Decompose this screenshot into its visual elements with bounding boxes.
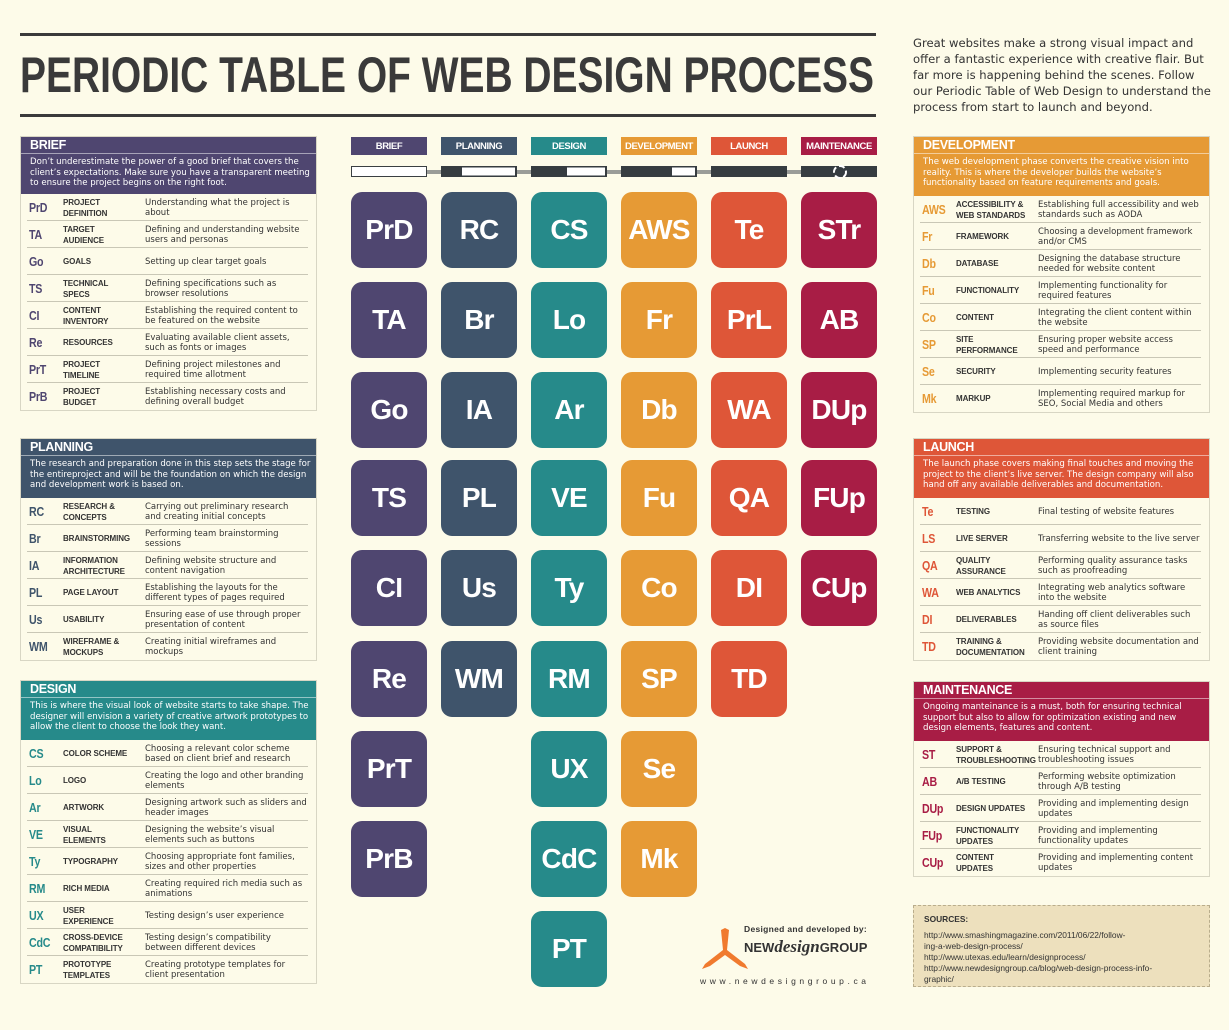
periodic tiles grid: PT bbox=[552, 933, 586, 964]
panel: launch: Final testing of website features bbox=[1038, 506, 1174, 516]
periodic tiles grid: Db bbox=[641, 394, 677, 425]
panel: design bbox=[20, 680, 317, 984]
periodic tiles grid: STr bbox=[818, 214, 860, 245]
panel: maintenance: MAINTENANCE bbox=[923, 683, 1012, 697]
panel: development: DEVELOPMENT bbox=[923, 138, 1015, 152]
periodic tiles grid: CI bbox=[376, 572, 402, 603]
panel: launch: TD bbox=[922, 639, 936, 654]
periodic tiles grid: AB bbox=[820, 304, 858, 335]
panel: design: USER EXPERIENCE bbox=[63, 906, 114, 926]
panel: brief bbox=[20, 136, 317, 411]
panel: maintenance: Performing website optimization through A/B testing bbox=[1038, 772, 1176, 792]
panel: planning bbox=[20, 438, 317, 661]
panel: development: Ensuring proper website access speed and performance bbox=[1038, 334, 1173, 354]
panel: brief: PrT bbox=[29, 362, 46, 377]
panel: maintenance: DUp bbox=[922, 801, 943, 816]
panel: design: Designing the website’s visual elements such as buttons bbox=[145, 824, 274, 844]
panel: brief: Establishing necessary costs and defining overall budget bbox=[145, 386, 286, 406]
panel: brief: TECHNICAL SPECS bbox=[63, 278, 108, 298]
panel: planning: Us bbox=[29, 612, 42, 627]
periodic tiles grid: Te bbox=[734, 214, 764, 245]
panel: development: ACCESSIBILITY & WEB STANDARDS bbox=[956, 200, 1025, 220]
panel: brief: PROJECT BUDGET bbox=[63, 386, 100, 406]
periodic tiles grid: AWS bbox=[628, 214, 690, 245]
panel: design: RM bbox=[29, 881, 45, 896]
periodic tiles grid: Co bbox=[641, 572, 677, 603]
panel: planning: Ensuring ease of use through proper presentation of content bbox=[145, 610, 300, 630]
panel: launch: DELIVERABLES bbox=[956, 615, 1017, 624]
intro text: Great websites make a strong visual impact and offer a fantastic experience with creative flair. But far more is happening behind the scenes. Follow our Periodic Table of Web Design to understand the process from start to launch and beyond. bbox=[913, 36, 1211, 114]
panel: development: AWS bbox=[922, 202, 946, 217]
panel: design: Ty bbox=[29, 854, 40, 869]
panel: design: Testing design’s compatibility between different devices bbox=[145, 932, 271, 952]
panel: design: ARTWORK bbox=[63, 803, 104, 812]
panel: development bbox=[913, 136, 1210, 413]
panel: planning: Creating initial wireframes and mockups bbox=[145, 636, 276, 656]
panel: maintenance: FUp bbox=[922, 828, 942, 843]
panel: maintenance: Providing and implementing design updates bbox=[1038, 798, 1189, 818]
panel: launch: QUALITY ASSURANCE bbox=[956, 556, 1006, 576]
logo credit: www.newdesigngroup.ca bbox=[700, 976, 870, 986]
periodic tiles grid: DUp bbox=[811, 394, 867, 425]
periodic tiles grid: SP bbox=[641, 663, 677, 694]
panel: planning: WM bbox=[29, 639, 47, 654]
panel: brief: PROJECT TIMELINE bbox=[63, 360, 100, 380]
panel: development: The web development phase converts the creative vision into reality. This is where the developer builds the website’s functionality based on feature requirements and goals. bbox=[923, 157, 1189, 188]
panel: development: FRAMEWORK bbox=[956, 232, 1009, 241]
panel: maintenance: CUp bbox=[922, 855, 943, 870]
panel: launch: Performing quality assurance tasks such as proofreading bbox=[1038, 556, 1187, 576]
panel: development: DATABASE bbox=[956, 259, 998, 268]
panel: brief: Defining and understanding website users and personas bbox=[145, 224, 299, 244]
panel: brief: PrB bbox=[29, 389, 47, 404]
panel: brief: Defining project milestones and required time allotment bbox=[145, 360, 280, 380]
panel: brief: Go bbox=[29, 254, 43, 269]
panel: design: CS bbox=[29, 746, 43, 761]
sources box: http://www.smashingmagazine.com/2011/06/22/follow- bbox=[924, 930, 1125, 940]
periodic tiles grid: PrD bbox=[365, 214, 413, 245]
sources box: graphic/ bbox=[924, 974, 954, 984]
periodic tiles grid: IA bbox=[466, 394, 492, 425]
panel: planning: WIREFRAME & MOCKUPS bbox=[63, 636, 119, 656]
panel: maintenance: FUNCTIONALITY UPDATES bbox=[956, 826, 1019, 846]
panel: launch: Transferring website to the live server bbox=[1038, 534, 1199, 544]
title bbox=[20, 33, 876, 117]
panel: planning: PL bbox=[29, 585, 42, 600]
sources box: http://www.newdesigngroup.ca/blog/web-design-process-info- bbox=[924, 963, 1152, 973]
panel: development: Co bbox=[922, 310, 936, 325]
periodic tiles grid: PL bbox=[462, 482, 496, 513]
panel: maintenance: A/B TESTING bbox=[956, 777, 1006, 786]
panel: brief: Evaluating available client assets, such as fonts or images bbox=[145, 332, 290, 352]
panel: design: Choosing a relevant color scheme based on client brief and research bbox=[145, 744, 290, 764]
periodic tiles grid: Br bbox=[464, 304, 494, 335]
panel: development: SITE PERFORMANCE bbox=[956, 334, 1018, 354]
periodic tiles grid: RM bbox=[548, 663, 590, 694]
sources box: SOURCES: bbox=[924, 914, 968, 924]
panel: maintenance bbox=[913, 681, 1210, 877]
panel: design: RICH MEDIA bbox=[63, 884, 110, 893]
panel: planning: Establishing the layouts for the different types of pages required bbox=[145, 582, 285, 602]
panel: maintenance: Providing and implementing content updates bbox=[1038, 852, 1193, 872]
panel: brief: Setting up clear target goals bbox=[145, 256, 266, 266]
panel: design: TYPOGRAPHY bbox=[63, 857, 118, 866]
periodic tiles grid: VE bbox=[551, 482, 587, 513]
periodic tiles grid: Lo bbox=[553, 304, 585, 335]
panel: development: Establishing full accessibility and web standards such as AODA bbox=[1038, 200, 1199, 220]
panel: design: Lo bbox=[29, 773, 42, 788]
logo credit bbox=[700, 924, 870, 986]
periodic tiles grid: UX bbox=[550, 753, 588, 784]
logo credit: Designed and developed by: bbox=[744, 924, 867, 934]
panel: brief: BRIEF bbox=[30, 138, 66, 152]
periodic tiles grid: TA bbox=[372, 304, 406, 335]
column labels: LAUNCH bbox=[730, 140, 768, 152]
panel: brief: RESOURCES bbox=[63, 338, 113, 347]
panel: planning: Carrying out preliminary research and creating initial concepts bbox=[145, 502, 288, 522]
panel: design: LOGO bbox=[63, 776, 86, 785]
periodic tiles grid: PrB bbox=[365, 843, 413, 874]
panel: maintenance: DESIGN UPDATES bbox=[956, 804, 1025, 813]
periodic tiles grid: CS bbox=[550, 214, 588, 245]
panel: design: CROSS-DEVICE COMPATIBILITY bbox=[63, 932, 123, 952]
panel: design: Creating required rich media such as animations bbox=[145, 878, 302, 898]
panel: design: DESIGN bbox=[30, 682, 76, 696]
panel: development: SECURITY bbox=[956, 367, 996, 376]
panel: planning: PAGE LAYOUT bbox=[63, 588, 118, 597]
panel: development: Fr bbox=[922, 229, 932, 244]
periodic tiles grid: Us bbox=[462, 572, 496, 603]
panel: brief: CI bbox=[29, 308, 39, 323]
panel: launch: TESTING bbox=[956, 507, 990, 516]
panel: development: Mk bbox=[922, 391, 936, 406]
panel: maintenance: AB bbox=[922, 774, 937, 789]
periodic tiles grid: Re bbox=[372, 663, 406, 694]
panel: design: Creating the logo and other branding elements bbox=[145, 770, 303, 790]
panel: planning: RC bbox=[29, 504, 44, 519]
panel: development: Implementing security features bbox=[1038, 366, 1172, 376]
panel: brief: TA bbox=[29, 227, 42, 242]
panel: design: CdC bbox=[29, 935, 50, 950]
panel: brief: PROJECT DEFINITION bbox=[63, 198, 107, 218]
periodic tiles grid: Fr bbox=[646, 304, 672, 335]
panel: brief: CONTENT INVENTORY bbox=[63, 306, 108, 326]
panel: planning: BRAINSTORMING bbox=[63, 534, 130, 543]
panel: development: Integrating the client content within the website bbox=[1038, 308, 1191, 328]
panel: design: Ar bbox=[29, 800, 40, 815]
panel: brief: TARGET AUDIENCE bbox=[63, 224, 104, 244]
panel: launch: Providing website documentation and client training bbox=[1038, 636, 1199, 656]
periodic tiles grid: PrT bbox=[367, 753, 411, 784]
periodic tiles grid: CdC bbox=[541, 843, 597, 874]
panel: launch: WEB ANALYTICS bbox=[956, 588, 1020, 597]
periodic tiles grid: Mk bbox=[640, 843, 678, 874]
panel: launch: TRAINING & DOCUMENTATION bbox=[956, 636, 1025, 656]
panel: maintenance: CONTENT UPDATES bbox=[956, 852, 994, 872]
progress bar bbox=[351, 165, 877, 179]
periodic tiles grid: FUp bbox=[813, 482, 865, 513]
panel: launch: QA bbox=[922, 558, 938, 573]
periodic tiles grid: WM bbox=[455, 663, 503, 694]
periodic tiles grid: Ty bbox=[554, 572, 584, 603]
panel: development: Choosing a development framework and/or CMS bbox=[1038, 226, 1192, 246]
panel: planning: Defining website structure and content navigation bbox=[145, 556, 276, 576]
panel: planning: Br bbox=[29, 531, 40, 546]
panel: brief: PrD bbox=[29, 200, 47, 215]
panel: launch bbox=[913, 438, 1210, 661]
panel: development: Implementing required markup for SEO, Social Media and others bbox=[1038, 388, 1185, 408]
column labels: BRIEF bbox=[376, 140, 402, 152]
panel: development: Designing the database structure needed for website content bbox=[1038, 254, 1181, 274]
panel: development: Se bbox=[922, 364, 935, 379]
panel: development: MARKUP bbox=[956, 394, 991, 403]
logo credit: NEWdesignGROUP bbox=[744, 937, 867, 956]
panel: launch: LIVE SERVER bbox=[956, 534, 1008, 543]
periodic tiles grid: Go bbox=[370, 394, 408, 425]
panel: planning: INFORMATION ARCHITECTURE bbox=[63, 556, 125, 576]
periodic tiles grid: RC bbox=[460, 214, 498, 245]
panel: development: SP bbox=[922, 337, 936, 352]
panel: development: FUNCTIONALITY bbox=[956, 286, 1019, 295]
panel: launch: LS bbox=[922, 531, 935, 546]
panel: design: PT bbox=[29, 962, 42, 977]
sources box: http://www.utexas.edu/learn/designprocess/ bbox=[924, 952, 1086, 962]
panel: planning: RESEARCH & CONCEPTS bbox=[63, 502, 115, 522]
column labels: DEVELOPMENT bbox=[625, 140, 693, 152]
panel: design: COLOR SCHEME bbox=[63, 749, 127, 758]
panel: planning: PLANNING bbox=[30, 440, 93, 454]
panel: brief: Understanding what the project is about bbox=[145, 198, 290, 218]
periodic tiles grid: DI bbox=[736, 572, 762, 603]
panel: brief: GOALS bbox=[63, 257, 91, 266]
periodic tiles grid: WA bbox=[727, 394, 771, 425]
periodic tiles grid: Se bbox=[643, 753, 675, 784]
panel: design: PROTOTYPE TEMPLATES bbox=[63, 960, 111, 980]
panel: maintenance: Ensuring technical support and troubleshooting issues bbox=[1038, 744, 1171, 764]
panel: design: This is where the visual look of website starts to take shape. The designer will envision a variety of creative artwork prototypes to allow the client to choose the look they want. bbox=[30, 701, 309, 732]
periodic tiles grid: PrL bbox=[727, 304, 771, 335]
panel: brief: TS bbox=[29, 281, 42, 296]
column labels bbox=[351, 137, 877, 155]
panel: brief: Defining specifications such as browser resolutions bbox=[145, 278, 276, 298]
panel: maintenance: Providing and implementing functionality updates bbox=[1038, 826, 1158, 846]
panel: design: Creating prototype templates for client presentation bbox=[145, 960, 285, 980]
panel: development: Fu bbox=[922, 283, 935, 298]
panel: design: Choosing appropriate font families, sizes and other properties bbox=[145, 852, 295, 872]
periodic tiles grid: Fu bbox=[643, 482, 675, 513]
periodic tiles grid: TS bbox=[372, 482, 406, 513]
sources box bbox=[913, 905, 1210, 987]
periodic tiles grid: TD bbox=[731, 663, 767, 694]
column labels: MAINTENANCE bbox=[806, 140, 872, 152]
panel: launch: The launch phase covers making final touches and moving the project to the client’s live server. The design company will also hand off any available deliverables and documentation. bbox=[923, 459, 1194, 490]
periodic tiles grid: CUp bbox=[811, 572, 867, 603]
panel: design: VISUAL ELEMENTS bbox=[63, 824, 106, 844]
periodic tiles grid bbox=[351, 192, 877, 987]
column labels: DESIGN bbox=[552, 140, 586, 152]
panel: development: Implementing functionality for required features bbox=[1038, 280, 1167, 300]
periodic tiles grid: Ar bbox=[554, 394, 584, 425]
panel: development: Db bbox=[922, 256, 936, 271]
panel: planning: The research and preparation done in this step sets the stage for the entireproject and will be the foundation on which the design and development work is based on. bbox=[30, 459, 310, 490]
panel: brief: Establishing the required content to be featured on the website bbox=[145, 306, 298, 326]
panel: planning: IA bbox=[29, 558, 39, 573]
panel: launch: DI bbox=[922, 612, 932, 627]
panel: maintenance: ST bbox=[922, 747, 935, 762]
panel: planning: Performing team brainstorming sessions bbox=[145, 528, 279, 548]
panel: design: Designing artwork such as sliders and header images bbox=[145, 798, 307, 818]
panel: planning: USABILITY bbox=[63, 615, 104, 624]
panel: launch: LAUNCH bbox=[923, 440, 974, 454]
panel: design: Testing design’s user experience bbox=[145, 910, 284, 920]
panel: launch: Te bbox=[922, 504, 933, 519]
panel: launch: WA bbox=[922, 585, 939, 600]
panel: maintenance: Ongoing manteinance is a must, both for ensuring technical support but also to allow for optimization existing and new design elements, features and content. bbox=[923, 702, 1182, 733]
panel: design: VE bbox=[29, 827, 43, 842]
column labels: PLANNING bbox=[456, 140, 502, 152]
panel: development: CONTENT bbox=[956, 313, 994, 322]
periodic tiles grid: QA bbox=[729, 482, 769, 513]
panel: brief: Re bbox=[29, 335, 42, 350]
panel: launch: Integrating web analytics software into the website bbox=[1038, 582, 1185, 602]
sources box: ing-a-web-design-process/ bbox=[924, 941, 1023, 951]
panel: maintenance: SUPPORT & TROUBLESHOOTING bbox=[956, 744, 1036, 764]
panel: launch: Handing off client deliverables such as source files bbox=[1038, 610, 1190, 630]
panel: brief: Don’t underestimate the power of a good brief that covers the client’s expectations. Make sure you have a transparent meeting to ensure the project begins on the right foot. bbox=[30, 157, 310, 188]
panel: design: UX bbox=[29, 908, 43, 923]
